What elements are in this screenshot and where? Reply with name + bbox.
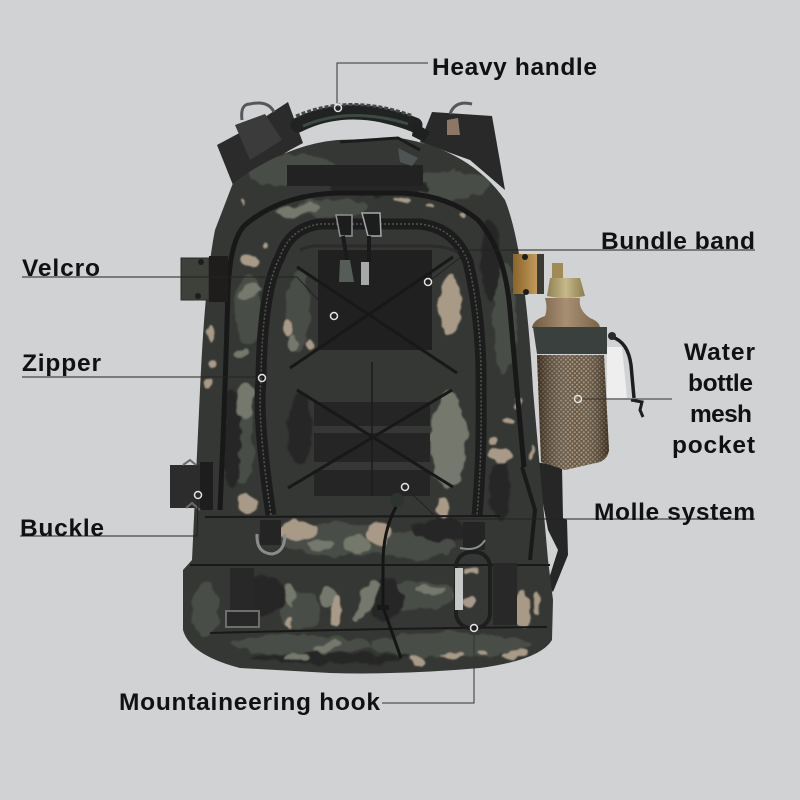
- centre zipper pulls: [336, 213, 381, 285]
- D-ring strap: [257, 520, 285, 554]
- callout: mountaineering hook: Mountaineering hook: [119, 689, 380, 716]
- callout: zipper: Zipper: [22, 350, 101, 377]
- side zip tabs: [522, 467, 535, 560]
- bungee cords: [288, 257, 457, 488]
- mesh pocket: [537, 355, 609, 470]
- callout: zipper: [22, 350, 266, 382]
- backpack illustration: [170, 102, 643, 673]
- callout: water bottle mesh pocket: bottle: [688, 370, 753, 397]
- molle system webbing: [314, 362, 430, 496]
- callout: buckle: Buckle: [20, 515, 104, 542]
- lower right strap: [493, 563, 517, 625]
- front velcro panel: [318, 250, 432, 350]
- inner zipper: [260, 224, 481, 515]
- lower left strap and buckle: [226, 568, 259, 627]
- callout: heavy handle: [334, 54, 597, 112]
- left lower buckle: [170, 460, 213, 510]
- water bottle: [532, 263, 643, 470]
- drawcord and toggle: [377, 493, 404, 658]
- heavy handle: [296, 104, 430, 142]
- mountaineering carabiner: [455, 540, 490, 628]
- camouflage pattern: [191, 154, 541, 667]
- sleeve collar: [533, 327, 607, 354]
- callout: molle system: [402, 484, 755, 526]
- infographic canvas: [20, 58, 755, 715]
- callout: velcro: Velcro: [22, 255, 100, 282]
- callout: buckle: [20, 492, 202, 542]
- top velcro patch: [287, 165, 423, 186]
- callout: bundle band: [424, 228, 755, 286]
- callout: mountaineering hook: [119, 624, 478, 716]
- left shoulder strap: [217, 102, 303, 185]
- carabiner strap: [463, 522, 485, 550]
- bottom compartment seams: [190, 516, 550, 633]
- callout: molle system: Molle system: [594, 499, 755, 526]
- right shoulder strap: [420, 103, 505, 190]
- callout: velcro: [22, 255, 338, 320]
- pack body: [183, 138, 553, 673]
- top zipper and pull: [340, 138, 420, 166]
- callout: water bottle mesh pocket: [574, 339, 755, 459]
- callout: bundle band: Bundle band: [601, 228, 755, 255]
- callout: water bottle mesh pocket: Water: [684, 339, 755, 366]
- white highlight behind cord: [607, 347, 627, 398]
- callout: water bottle mesh pocket: pocket: [672, 432, 755, 459]
- panel top strap: [300, 246, 458, 252]
- right side strap: [535, 462, 568, 592]
- left upper buckle: [181, 256, 228, 302]
- callout: water bottle mesh pocket: mesh: [690, 401, 752, 428]
- outer zipper: [220, 193, 524, 510]
- right upper buckle: [513, 254, 544, 295]
- callout: heavy handle: Heavy handle: [432, 54, 597, 81]
- drawstring cord: [608, 332, 643, 417]
